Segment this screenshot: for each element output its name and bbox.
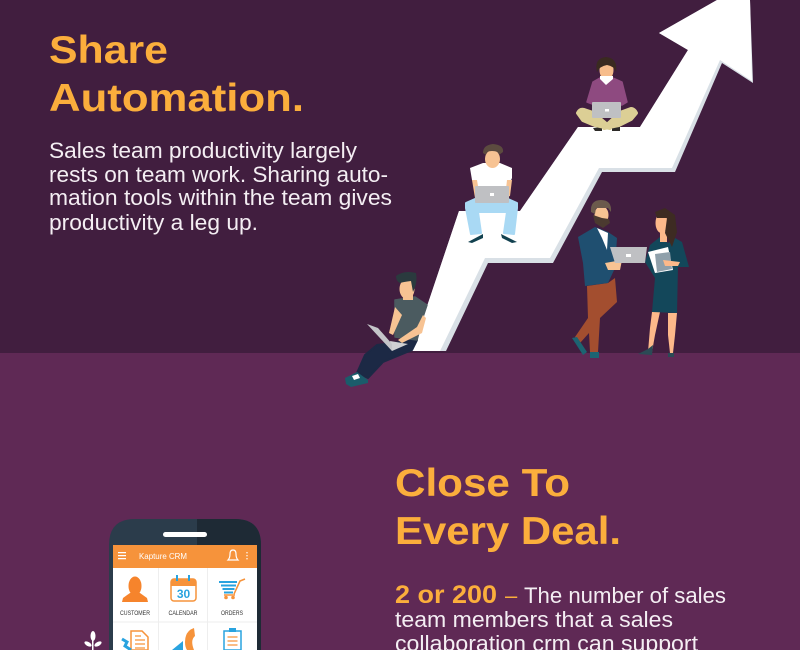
- illustration: phone showing Kapture CRM: Kapture CRM: [139, 551, 187, 561]
- icon: phone call: [172, 628, 195, 650]
- panel: close to every deal background: [0, 353, 800, 650]
- illustration: person cross-legged at top of arrow: [578, 57, 636, 131]
- text block: share automation description: [49, 138, 392, 235]
- text block: close to every deal description: team members that a sales: [395, 607, 673, 632]
- illustration: man sitting on arrow step with laptop: [466, 144, 517, 243]
- heading: close to every deal: [395, 462, 621, 553]
- heading: share automation: Automation.: [49, 77, 304, 120]
- illustration: phone showing Kapture CRM: [109, 519, 261, 650]
- text block: share automation description: productivity a leg up.: [49, 210, 258, 235]
- panel: share automation background: [0, 0, 800, 353]
- text block: share automation description: Sales team productivity largely: [49, 138, 357, 163]
- text block: close to every deal description: –: [505, 583, 518, 608]
- icon: clipboard: [224, 628, 241, 650]
- icon: rising staircase arrow: [412, 0, 753, 351]
- text block: share automation description: mation tools within the team gives: [49, 185, 392, 210]
- illustration: phone showing Kapture CRM: CUSTOMER: [120, 611, 151, 617]
- heading: share automation: [49, 29, 304, 120]
- text block: close to every deal description: The number of sales: [524, 583, 726, 608]
- icon: orders cart: [219, 579, 245, 599]
- icon: calendar: 30: [177, 587, 190, 601]
- text block: close to every deal description: 2 or 200: [395, 581, 497, 609]
- text block: close to every deal description: [395, 581, 726, 650]
- icon: calendar: [171, 575, 196, 601]
- icon: plant sprig: [84, 631, 102, 650]
- illustration: man and woman standing with laptop and documents: [572, 200, 689, 358]
- heading: close to every deal: Every Deal.: [395, 510, 621, 553]
- icon: customer: [122, 576, 148, 602]
- illustration: phone showing Kapture CRM: ORDERS: [221, 611, 243, 617]
- heading: close to every deal: Close To: [395, 462, 570, 505]
- illustration: person sitting on arrow base with laptop: [345, 272, 427, 387]
- text block: share automation description: rests on team work. Sharing auto-: [49, 162, 388, 187]
- heading: share automation: Share: [49, 29, 168, 72]
- illustration: phone showing Kapture CRM: CALENDAR: [168, 611, 198, 617]
- icon: document: [122, 631, 148, 650]
